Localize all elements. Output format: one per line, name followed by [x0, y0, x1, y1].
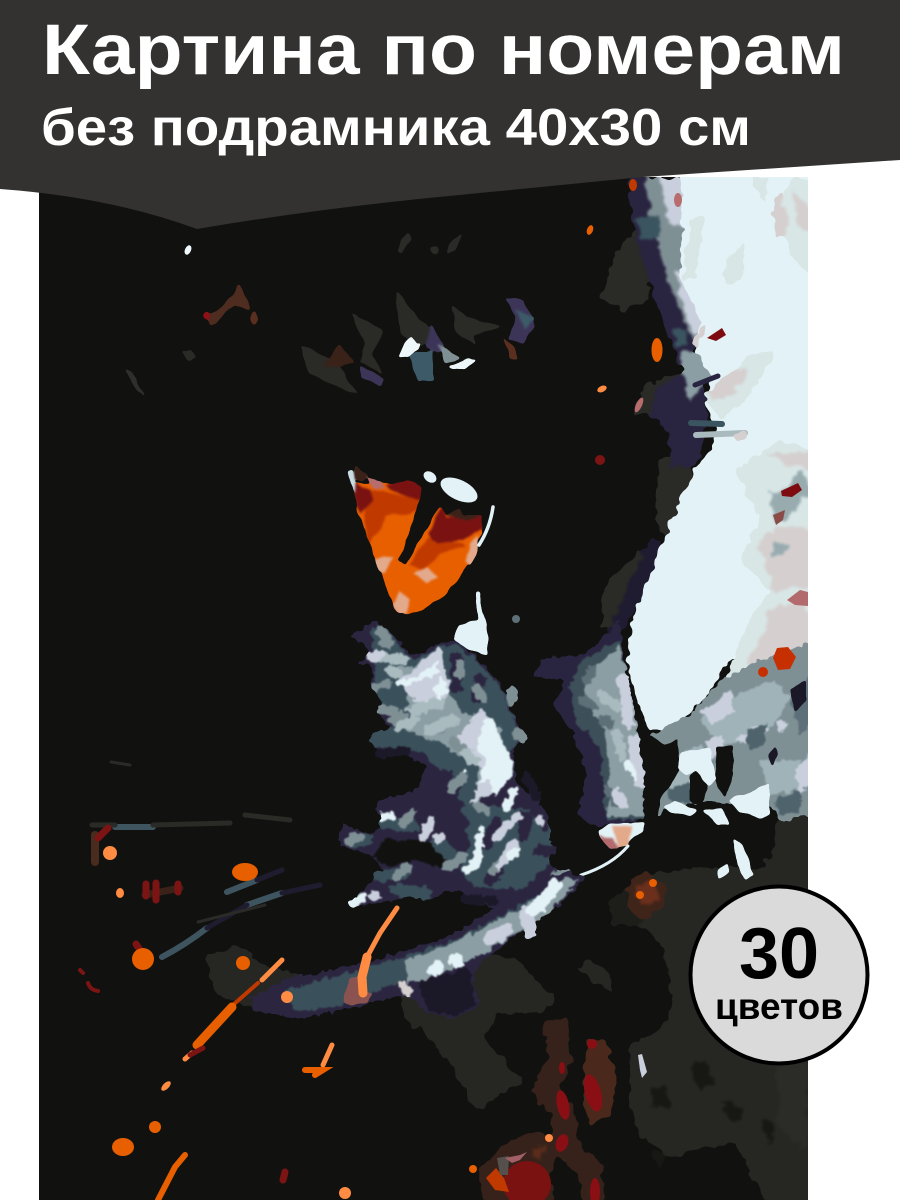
fur	[340, 620, 570, 910]
lip brown	[355, 465, 482, 520]
title line 2: без подрамника 40х30 см	[41, 99, 751, 157]
title line 1: Картина по номерам	[42, 11, 845, 90]
pale patches	[682, 177, 808, 678]
right side red spots	[707, 328, 808, 677]
eye highlights	[398, 336, 477, 370]
painting background	[39, 177, 808, 1200]
left lip highlight	[347, 468, 356, 493]
chin spike	[453, 592, 488, 655]
small drop	[512, 615, 520, 623]
lips darker orange	[363, 490, 465, 570]
lower right white highlights	[663, 748, 770, 880]
right edge shadows	[600, 178, 720, 642]
neck column	[533, 620, 643, 827]
badge: 30 colours	[690, 886, 868, 1064]
badge label: цветов	[715, 986, 843, 1027]
red spots	[469, 879, 657, 1200]
tooth large	[440, 478, 478, 502]
orange drops	[103, 179, 682, 1199]
arm red patch	[344, 976, 372, 1006]
lower right black gaps	[634, 681, 806, 820]
upper left speckles	[124, 230, 463, 398]
lower pale specks	[638, 1054, 647, 1078]
dark lower right background	[205, 812, 815, 1200]
painting	[39, 170, 815, 1200]
header banner	[0, 0, 900, 229]
eye	[300, 290, 535, 394]
lips deep red	[355, 480, 483, 543]
streaks	[80, 762, 397, 1200]
mouth	[347, 465, 483, 615]
badge number: 30	[739, 914, 819, 994]
lower brown red marks	[477, 870, 665, 1200]
lip pink	[367, 477, 387, 490]
shoulder highlight	[598, 822, 645, 850]
lips peach	[375, 535, 478, 613]
badge circle	[690, 886, 868, 1064]
edge spikes	[691, 376, 745, 435]
lower right grey area	[650, 642, 808, 822]
white dot	[184, 245, 192, 255]
light background	[627, 170, 815, 730]
lips orange	[355, 483, 482, 615]
tooth small	[424, 471, 436, 483]
right lip highlight	[479, 507, 493, 545]
arm	[250, 870, 585, 1018]
shoulder curve	[581, 846, 628, 875]
